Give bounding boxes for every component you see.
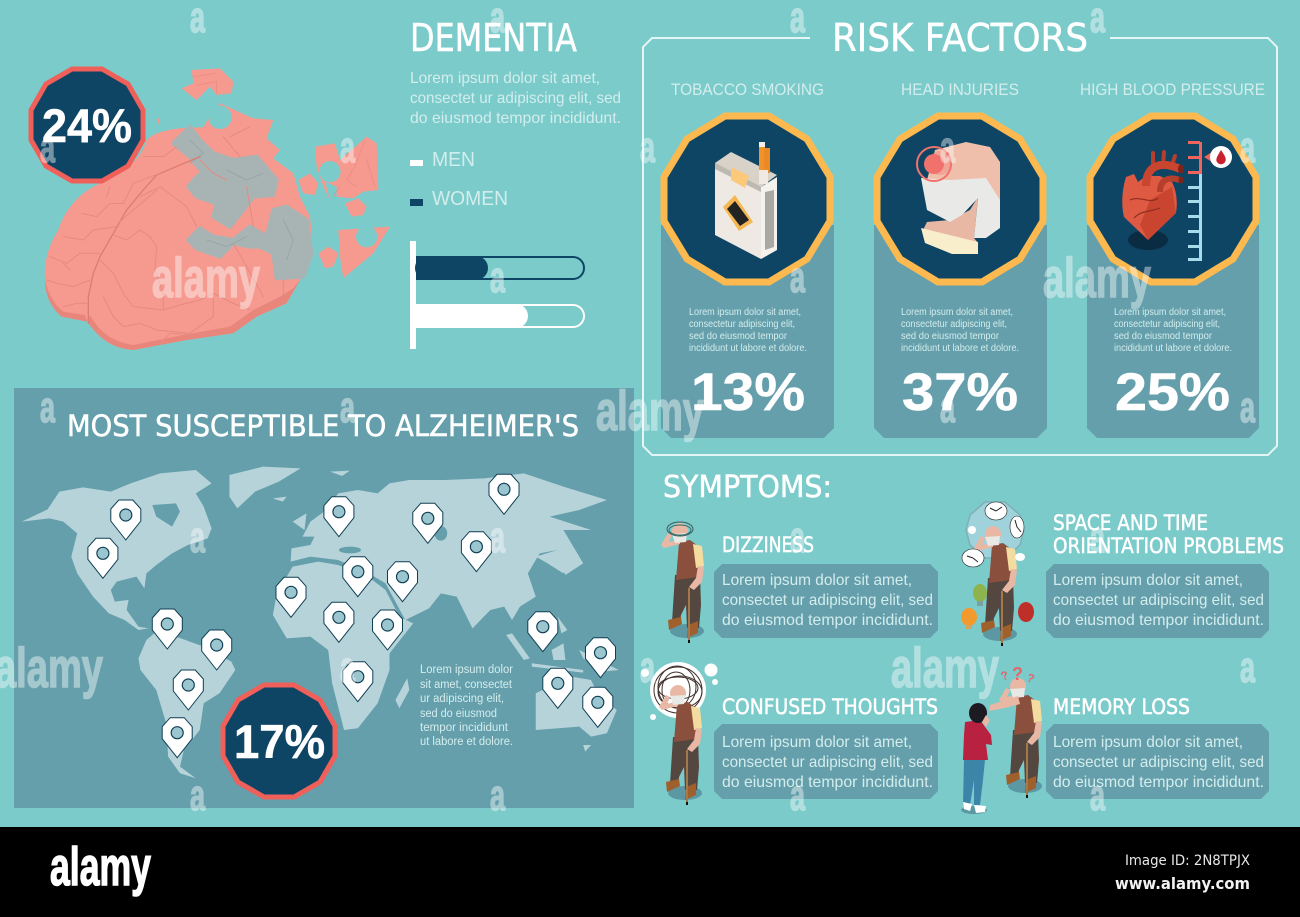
symptom: dizziness: DIZZINESS	[722, 533, 814, 557]
text block: map note: tempor incididunt	[420, 722, 509, 734]
risk column: high blood pressure: 25%	[1115, 363, 1230, 422]
badge: 17%	[223, 685, 335, 797]
watermarks: a	[640, 123, 655, 172]
symptom: memory loss: do eiusmod tempor incididunt.	[1053, 774, 1264, 791]
symptom: dizziness: consectet ur adipiscing elit, sed	[722, 592, 933, 609]
symptom: space and time orientation: Lorem ipsum dolor sit amet,	[1053, 572, 1243, 589]
figure: man and woman: ?	[1025, 670, 1036, 686]
figure: man with clocks	[961, 502, 1034, 646]
figure: man and woman: ?	[1012, 664, 1023, 684]
brain illustration	[45, 68, 390, 350]
title: dementia: DEMENTIA	[410, 16, 577, 60]
watermarks: alamy	[152, 246, 260, 309]
footer bar: alamy	[50, 837, 151, 897]
watermarks: a	[1240, 643, 1255, 692]
legend: MEN	[432, 149, 475, 171]
figure: man and woman	[961, 664, 1042, 814]
text block: head: sed do eiusmod tempor	[901, 331, 1000, 342]
text block: dementia description: Lorem ipsum dolor sit amet,	[410, 70, 600, 87]
risk column: tobacco smoking	[661, 80, 834, 438]
symptom: dizziness: do eiusmod tempor incididunt.	[722, 612, 933, 629]
text block: head: consectetur adipiscing elit,	[901, 319, 1007, 330]
panel: risk factors	[643, 16, 1277, 455]
legend: WOMEN	[432, 188, 508, 210]
text block: blood pressure: sed do eiusmod tempor	[1114, 331, 1213, 342]
risk column: head injuries: HEAD INJURIES	[901, 80, 1019, 99]
panel: most susceptible map	[14, 388, 634, 808]
heading: symptoms: SYMPTOMS:	[663, 470, 832, 505]
symptom: memory loss: consectet ur adipiscing elit, sed	[1053, 754, 1264, 771]
watermarks: alamy	[596, 379, 704, 442]
text block: map note: Lorem ipsum dolor	[420, 664, 513, 676]
text block: dementia description	[410, 70, 621, 127]
map pins	[88, 474, 615, 758]
symptom: space and time orientation: do eiusmod tempor incididunt.	[1053, 612, 1264, 629]
symptom: confused thoughts: do eiusmod tempor incididunt.	[722, 774, 933, 791]
world map	[22, 467, 619, 778]
watermarks: a	[490, 771, 505, 820]
watermarks: a	[1240, 383, 1255, 432]
watermarks: a	[640, 643, 655, 692]
watermarks: a	[1240, 123, 1255, 172]
watermarks: a	[790, 253, 805, 302]
text block: blood pressure	[1114, 307, 1232, 354]
symptom: dizziness: Lorem ipsum dolor sit amet,	[722, 572, 912, 589]
symptom: confused thoughts: Lorem ipsum dolor sit amet,	[722, 734, 912, 751]
figure: man and woman: ?	[999, 668, 1010, 684]
symptom: confused thoughts	[641, 662, 938, 805]
watermarks: a	[1090, 513, 1105, 562]
text block: dementia description: do eiusmod tempor incididunt.	[410, 110, 621, 127]
text block: dementia description: consectet ur adipiscing elit, sed	[410, 90, 621, 107]
icon: injured head	[917, 142, 1000, 254]
icon: heart and gauge	[1122, 141, 1232, 261]
badge: 24%: 24%	[42, 99, 132, 152]
text block: blood pressure: incididunt ut labore et dolore.	[1114, 343, 1232, 354]
legend	[410, 149, 508, 210]
symptom: confused thoughts: consectet ur adipiscing elit, sed	[722, 754, 933, 771]
footer bar	[0, 827, 1300, 917]
text block: map note: sed do eiusmod	[420, 708, 497, 720]
watermarks: a	[340, 123, 355, 172]
text block: tobacco	[689, 307, 807, 354]
figure: dizzy man	[661, 522, 704, 643]
watermarks: a	[340, 643, 355, 692]
watermarks: a	[940, 123, 955, 172]
watermarks: a	[490, 513, 505, 562]
risk column: high blood pressure: HIGH BLOOD PRESSURE	[1080, 80, 1265, 99]
text block: tobacco: consectetur adipiscing elit,	[689, 319, 795, 330]
watermarks: a	[790, 513, 805, 562]
text block: tobacco: Lorem ipsum dolor sit amet,	[689, 307, 801, 318]
text block: map note	[420, 664, 513, 748]
watermarks: a	[490, 253, 505, 302]
symptom: memory loss: Lorem ipsum dolor sit amet,	[1053, 734, 1243, 751]
symptom: space and time orientation: SPACE AND TIME	[1053, 511, 1208, 535]
symptom: memory loss	[961, 664, 1269, 814]
text block: map note: ur adipiscing elit,	[420, 693, 504, 705]
symptom: confused thoughts: CONFUSED THOUGHTS	[722, 695, 938, 719]
watermarks: a	[40, 383, 55, 432]
watermarks: a	[40, 123, 55, 172]
symptom: space and time orientation	[961, 502, 1284, 646]
text block: blood pressure: Lorem ipsum dolor sit amet,	[1114, 307, 1226, 318]
text block: tobacco: incididunt ut labore et dolore.	[689, 343, 807, 354]
watermarks: a	[940, 383, 955, 432]
icon: cigarette pack	[715, 142, 777, 259]
text block: map note: sit amet, consectet	[420, 679, 513, 691]
text block: head	[901, 307, 1019, 354]
text block: map note: ut labore et dolore.	[420, 736, 513, 748]
symptom: space and time orientation: consectet ur adipiscing elit, sed	[1053, 592, 1264, 609]
watermarks: a	[340, 383, 355, 432]
risk column: head injuries	[874, 80, 1047, 438]
watermarks: alamy	[1043, 246, 1151, 309]
watermarks: a	[790, 771, 805, 820]
watermarks: a	[190, 513, 205, 562]
footer bar: www.alamy.com	[1115, 874, 1250, 893]
symptom: dizziness	[661, 522, 938, 643]
badge: 24%	[31, 69, 143, 181]
risk column: tobacco smoking: 13%	[691, 363, 805, 422]
text block: tobacco: sed do eiusmod tempor	[689, 331, 788, 342]
risk column: tobacco smoking: TOBACCO SMOKING	[671, 80, 824, 99]
watermarks: a	[1090, 771, 1105, 820]
risk column: head injuries: 37%	[902, 363, 1018, 422]
bar chart: men and women	[410, 241, 584, 349]
watermarks: a	[190, 771, 205, 820]
symptom: memory loss: MEMORY LOSS	[1053, 695, 1190, 719]
badge: 17%: 17%	[234, 715, 325, 768]
watermarks: alamy	[891, 636, 999, 699]
title: risk factors: RISK FACTORS	[832, 16, 1088, 60]
text block: blood pressure: consectetur adipiscing elit,	[1114, 319, 1220, 330]
text block: head: Lorem ipsum dolor sit amet,	[901, 307, 1013, 318]
risk column: high blood pressure	[1080, 80, 1265, 438]
heading: most susceptible: MOST SUSCEPTIBLE TO ALZHEIMER'S	[67, 409, 579, 443]
figure: confused man	[641, 662, 718, 805]
text block: head: incididunt ut labore et dolore.	[901, 343, 1019, 354]
footer bar: Image ID: 2N8TPJX	[1125, 853, 1250, 869]
